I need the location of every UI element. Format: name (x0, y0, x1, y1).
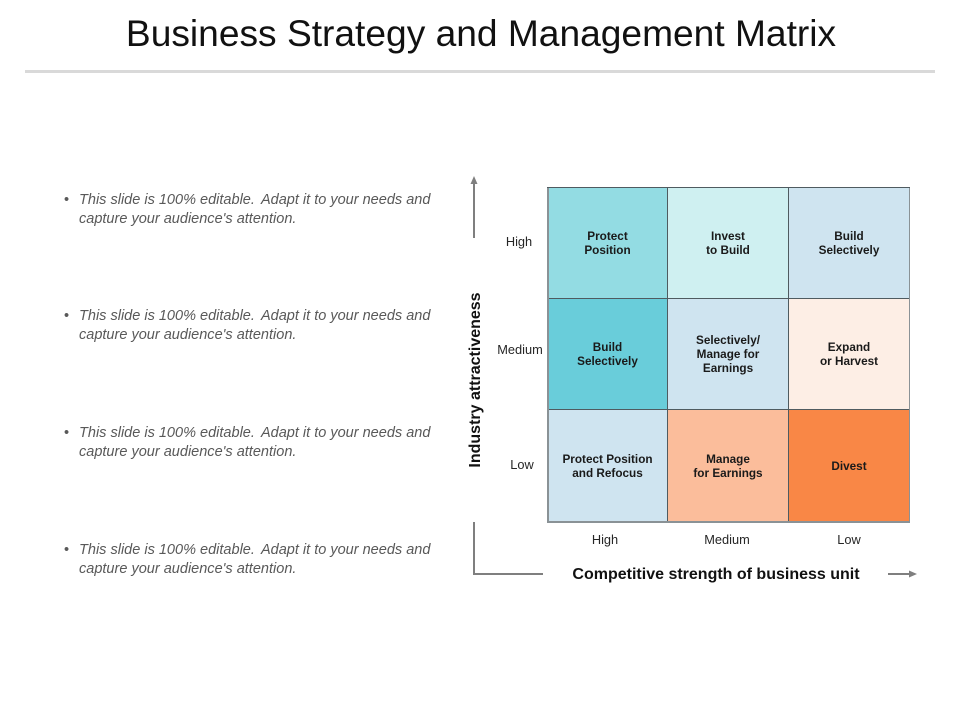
text block 4 (64, 542, 431, 576)
cell: Protect Position and Refocus: Protect Position (562, 452, 653, 466)
cell: Selectively / Manage for Earnings: Earnings (703, 362, 753, 374)
text block 2: This slide is 100% editable. Adapt it to your needs and (79, 308, 430, 324)
cell: Selectively / Manage for Earnings: Manage for (697, 348, 759, 360)
cell: Manage for Earnings (667, 409, 789, 523)
arrow: y axis up (470, 176, 478, 238)
column label: Medium: Medium (704, 532, 750, 547)
text block 4: • (64, 542, 69, 558)
title: Business Strategy and Management Matrix (126, 12, 836, 54)
cell: Expand or Harvest (788, 298, 910, 410)
grid outer edge (547, 188, 910, 523)
cell: Protect Position: Protect (587, 230, 628, 242)
cell: Invest to Build: Invest (711, 230, 745, 242)
text block 4: capture your audience's attention. (79, 560, 296, 576)
axis corner bracket (474, 522, 543, 574)
cell: Invest to Build: to Build (706, 244, 750, 256)
text block 1 (64, 192, 431, 226)
cell: Build Selectively top right: Selectively (819, 244, 879, 256)
cell: Build Selectively top right: Build (834, 230, 864, 242)
cell: Manage for Earnings: for Earnings (693, 466, 763, 480)
text block 2 (64, 308, 431, 342)
cell: Manage for Earnings: Manage (706, 452, 750, 466)
y axis title: Industry attractiveness (467, 292, 484, 468)
cell: Invest to Build (667, 187, 789, 299)
text block 1: • (64, 192, 69, 208)
cell: Protect Position: Position (584, 244, 631, 256)
text block 3 (64, 425, 431, 460)
text block 4: This slide is 100% editable. Adapt it to your needs and (79, 542, 430, 558)
cell: Selectively / Manage for Earnings (667, 298, 789, 410)
cell: Divest (788, 409, 910, 523)
cell: Expand or Harvest: Expand (828, 340, 870, 354)
text block 3: • (64, 425, 69, 441)
text block 3: This slide is 100% editable. Adapt it to your needs and (79, 425, 430, 441)
column label: Low: Low (837, 532, 861, 547)
row label: Low: Low (510, 457, 534, 472)
cell: Protect Position (547, 187, 668, 299)
row label: Medium: Medium (497, 342, 543, 357)
text block 3: capture your audience's attention. (79, 444, 296, 460)
x axis title: Competitive strength of business unit (572, 566, 860, 583)
row label: High: High (506, 234, 532, 249)
text block 1: This slide is 100% editable. Adapt it to your needs and (79, 192, 430, 208)
cell: Build Selectively middle left: Build (593, 340, 622, 354)
cell: Protect Position and Refocus (547, 409, 668, 523)
cell: Build Selectively middle left (547, 298, 668, 410)
cell: Divest: Divest (831, 460, 867, 472)
cell: Selectively / Manage for Earnings: Selectively/ (696, 334, 760, 346)
cell: Protect Position and Refocus: and Refocus (572, 466, 643, 480)
cell: Build Selectively middle left: Selectively (577, 354, 638, 368)
cell: Build Selectively top right (788, 187, 910, 299)
text block 2: • (64, 308, 69, 324)
matrix grid (547, 187, 910, 523)
column label: High: High (592, 532, 618, 547)
cell: Expand or Harvest: or Harvest (820, 354, 878, 368)
title underline (25, 70, 935, 73)
arrow: x axis right (888, 570, 917, 578)
text block 2: capture your audience's attention. (79, 326, 296, 342)
text block 1: capture your audience's attention. (79, 210, 296, 226)
